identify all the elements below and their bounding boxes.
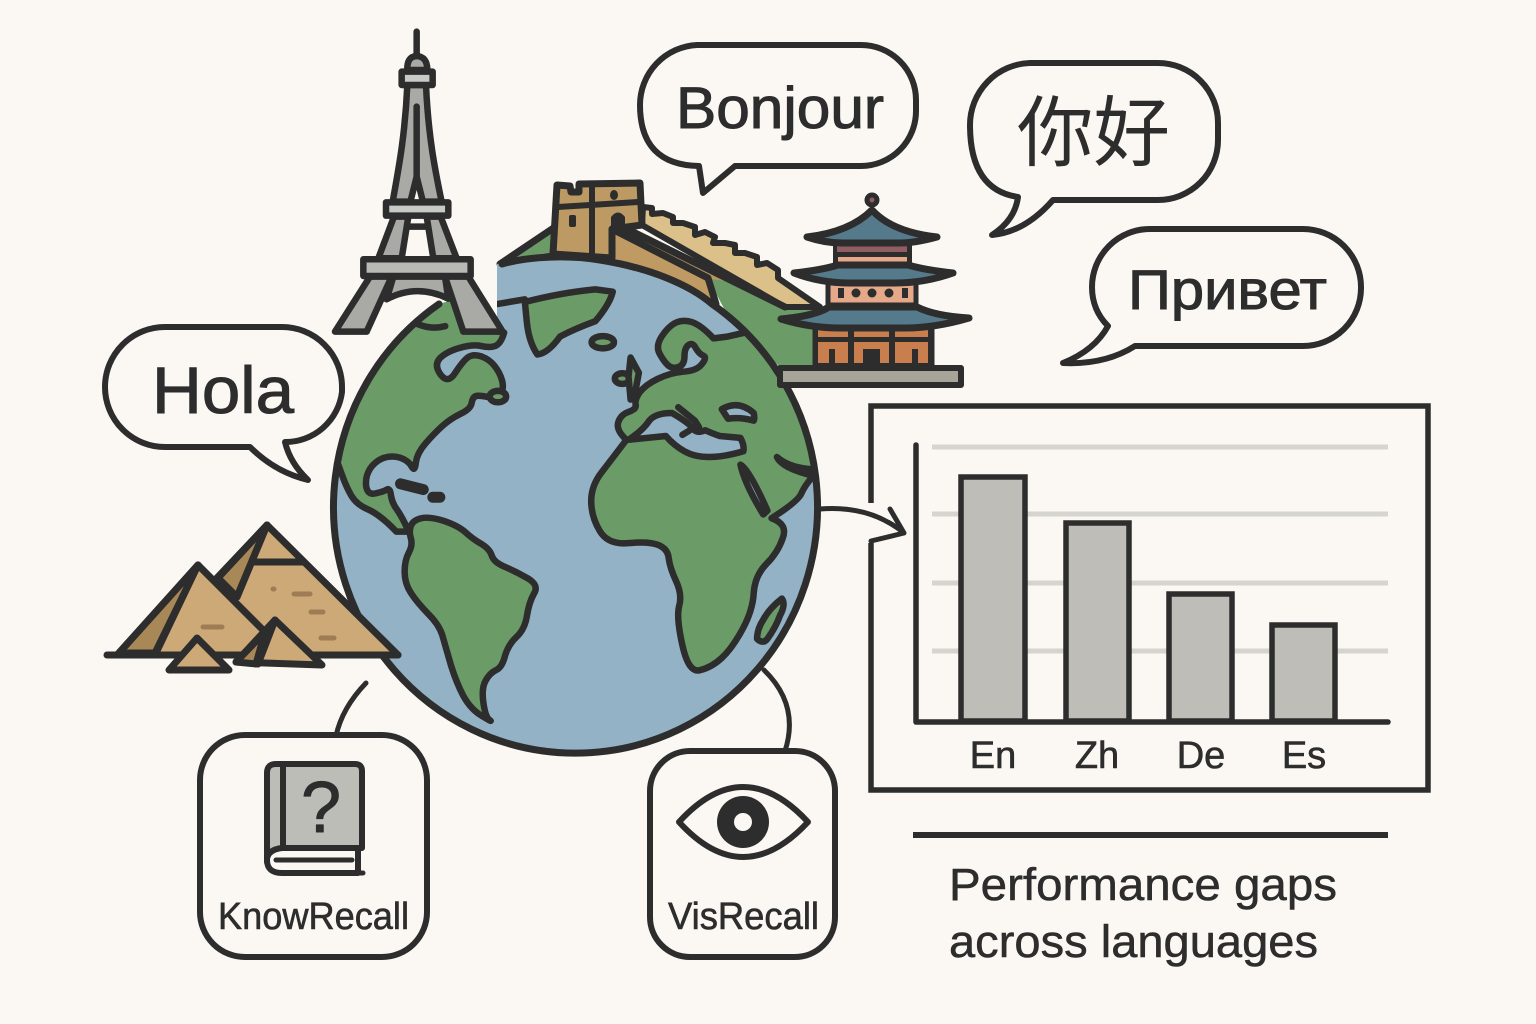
- small pyramid right: [236, 620, 322, 665]
- platform: [780, 368, 961, 385]
- wall front face: [612, 229, 718, 304]
- medium pyramid: [117, 565, 265, 655]
- icon: book with question mark: ?: [301, 768, 341, 848]
- globe outline: [333, 257, 817, 753]
- axis labels: De: [1177, 735, 1225, 777]
- axis labels: [970, 735, 1326, 777]
- chart axes: [916, 445, 1388, 722]
- panel: KnowRecall: KnowRecall: [218, 896, 409, 938]
- axis labels: En: [970, 735, 1016, 777]
- arrow from globe to chart: [820, 508, 904, 541]
- panel: KnowRecall: [200, 735, 427, 957]
- large pyramid: [215, 525, 398, 655]
- lower hall: [815, 327, 932, 366]
- speech bubble: Chinese greeting: 你好: [1017, 91, 1170, 177]
- bar: Es: [1272, 625, 1335, 721]
- globe: [330, 254, 822, 757]
- wall tan strip: [612, 227, 728, 281]
- upper band: [835, 243, 910, 265]
- axis labels: Zh: [1075, 735, 1119, 777]
- icon: eye: [679, 787, 808, 857]
- small pyramid centre: [169, 638, 229, 670]
- speech bubble: Chinese greeting: [970, 63, 1218, 235]
- caption: [949, 859, 1337, 967]
- pagoda temple: [780, 195, 969, 385]
- left hill: [500, 227, 555, 264]
- divider above caption: [913, 832, 1388, 838]
- Eiffel Tower: [335, 32, 503, 332]
- speech bubble: Hola: Hola: [152, 353, 294, 427]
- speech bubble: Russian greeting: [1063, 229, 1361, 363]
- caption: Performance gaps: [949, 859, 1337, 910]
- bar: De: [1169, 594, 1232, 721]
- axis labels: Es: [1282, 735, 1326, 777]
- tower: [553, 183, 642, 258]
- speech bubble: Bonjour: [640, 45, 916, 193]
- speech bubble: Hola: [105, 327, 342, 480]
- caption: across languages: [949, 916, 1318, 967]
- stone marks: [203, 589, 334, 638]
- panel: VisRecall: VisRecall: [668, 896, 819, 938]
- icon: book with question mark: [267, 764, 363, 873]
- middle roof: [794, 265, 953, 283]
- middle hall: [828, 283, 916, 305]
- connector to KnowRecall: [336, 683, 366, 736]
- upper wall walkway: [642, 207, 820, 307]
- bar: En: [961, 477, 1025, 721]
- top roof: [807, 210, 937, 243]
- speech bubble: Bonjour: Bonjour: [676, 76, 884, 141]
- bar: Zh: [1066, 523, 1129, 721]
- bar chart panel: [868, 406, 1428, 790]
- panel: VisRecall: [650, 751, 835, 957]
- speech bubble: Russian greeting: Привет: [1128, 258, 1327, 321]
- finial: [867, 195, 877, 205]
- right hill: [708, 278, 820, 367]
- connector to VisRecall: [764, 670, 789, 751]
- continents: [339, 286, 813, 724]
- Great Wall with tower: [500, 183, 820, 367]
- pyramids: [107, 525, 398, 670]
- lower roof: [781, 307, 969, 328]
